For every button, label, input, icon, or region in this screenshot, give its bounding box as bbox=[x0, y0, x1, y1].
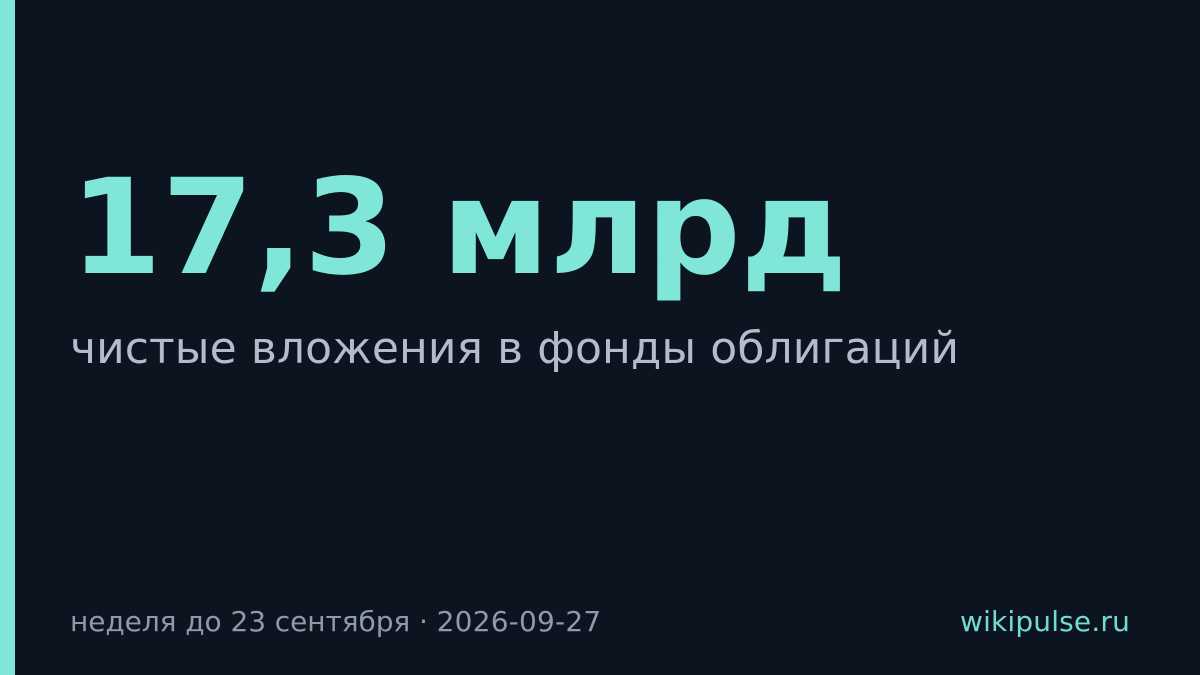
date line: неделя до 23 сентября · 2026-09-27 bbox=[70, 605, 601, 638]
headline value: 17,3 млрд bbox=[70, 151, 847, 305]
source site: wikipulse.ru bbox=[960, 605, 1130, 638]
subtitle: чистые вложения в фонды облигаций bbox=[70, 323, 959, 374]
accent bar bbox=[0, 0, 15, 675]
